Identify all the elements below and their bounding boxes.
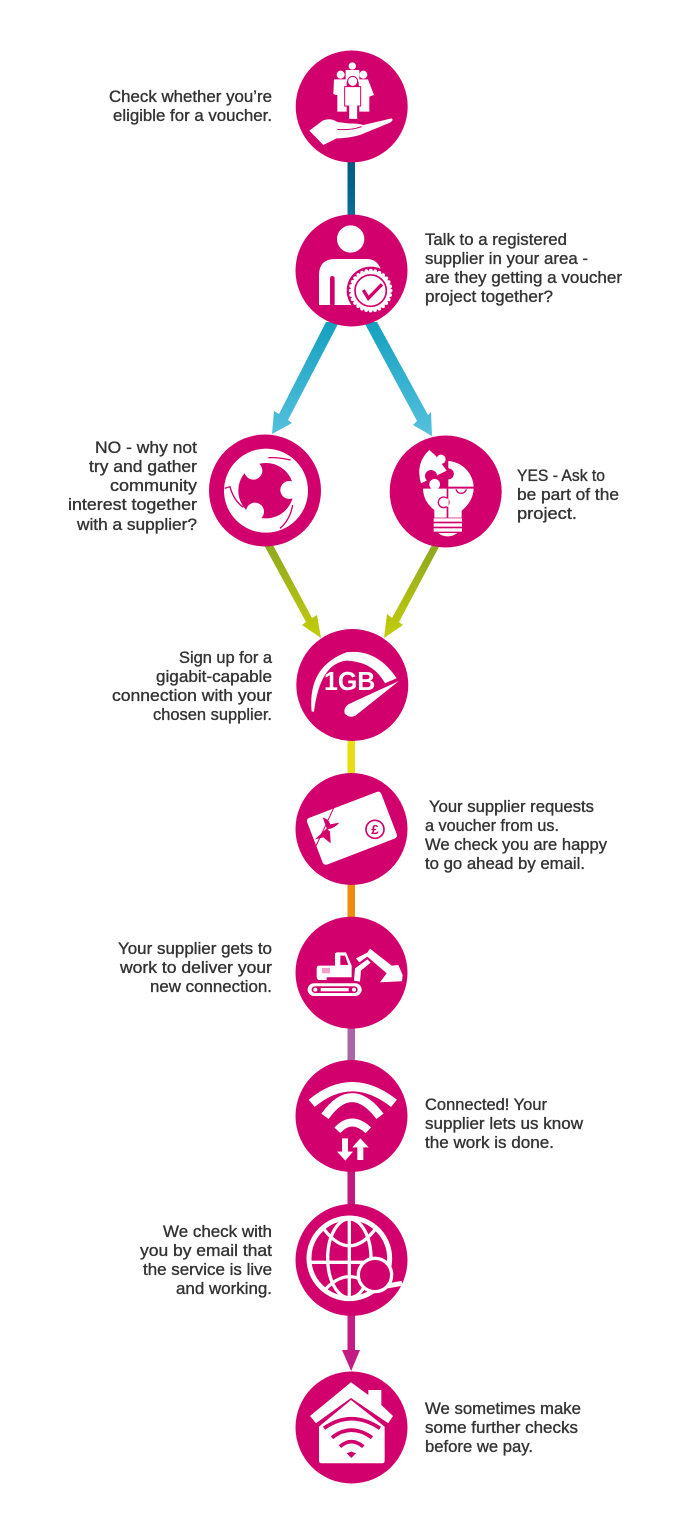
icon: people above an open hand <box>309 62 393 145</box>
icon: excavator <box>308 949 403 996</box>
text: connected: supplier lets us know <box>425 1115 583 1133</box>
text: service check: the service is live <box>143 1261 272 1279</box>
text: NO branch: with a supplier? <box>76 516 197 534</box>
icon: wifi with up and down arrows <box>312 1087 394 1161</box>
connector: works to connected <box>348 1026 355 1064</box>
text: connected: Connected! Your <box>425 1096 547 1114</box>
text: NO branch: interest together <box>68 496 198 514</box>
text: service check: We check with <box>163 1223 272 1241</box>
text: NO branch: try and gather <box>89 458 198 476</box>
connector: step 1 to step 2 <box>348 160 355 218</box>
step 2: registered supplier <box>296 214 408 326</box>
text: connected: the work is done. <box>425 1134 554 1152</box>
step 9: service check <box>296 1204 408 1316</box>
text: sign up: connection with your <box>112 687 273 705</box>
text: service check: and working. <box>176 1280 272 1298</box>
step 1: eligibility <box>296 50 408 162</box>
icon: jigsaw lightbulb <box>419 450 474 536</box>
circle <box>296 50 408 162</box>
step 3: NO branch <box>209 434 321 546</box>
icon: person with rosette tick badge <box>319 225 395 315</box>
text: voucher request: Your supplier requests <box>429 798 594 816</box>
circle <box>296 1204 408 1316</box>
step 6: voucher request <box>296 773 408 885</box>
arrow: NO branch to sign up <box>264 545 321 638</box>
icon: 1GB speedometer: 1GB <box>324 666 375 696</box>
circle <box>296 214 408 326</box>
text: further checks: before we pay. <box>425 1438 533 1456</box>
step 7: build work <box>296 917 408 1029</box>
text: build work: Your supplier gets to <box>118 940 272 958</box>
text: step 2: supplier in your area - <box>425 250 588 268</box>
text: step 2: project together? <box>425 288 553 306</box>
text: further checks <box>425 1400 581 1456</box>
step 10: further checks <box>296 1372 408 1484</box>
text: voucher request <box>425 798 608 873</box>
text: YES branch: YES - Ask to <box>517 467 605 485</box>
arrow: to YES branch <box>364 322 432 436</box>
text: step 2: Talk to a registered <box>425 231 567 249</box>
connector: voucher to works <box>348 882 355 920</box>
text: NO branch: NO - why not <box>95 439 197 457</box>
text: sign up <box>112 649 273 724</box>
circle <box>296 917 408 1029</box>
text: YES branch: be part of the <box>517 486 619 504</box>
arrow: YES branch to sign up <box>384 545 440 638</box>
text: sign up: chosen supplier. <box>153 706 272 724</box>
text: service check <box>140 1223 272 1298</box>
text: service check: you by email that <box>140 1242 272 1260</box>
text: further checks: We sometimes make <box>425 1400 581 1418</box>
arrow: to NO branch <box>272 322 339 434</box>
text: voucher request: a voucher from us. <box>425 817 559 835</box>
text: NO branch <box>68 439 198 534</box>
icon: house with wifi <box>310 1382 393 1463</box>
icon: three people in a circle <box>224 449 308 533</box>
text: NO branch: community <box>110 477 198 495</box>
text: sign up: Sign up for a <box>179 649 273 667</box>
circle <box>296 773 408 885</box>
text: step 2: are they getting a voucher <box>425 269 623 287</box>
text: build work <box>118 940 273 996</box>
text: voucher request: We check you are happy <box>425 836 608 854</box>
text: sign up: gigabit-capable <box>156 668 272 686</box>
text: build work: work to deliver your <box>119 959 273 977</box>
text: step 1: eligible for a voucher. <box>113 107 272 125</box>
text: build work: new connection. <box>150 978 272 996</box>
connector: connected to check <box>348 1170 355 1208</box>
icon: gift voucher card: £ <box>371 822 379 837</box>
circle <box>390 436 502 548</box>
text: step 1: Check whether you’re <box>109 88 272 106</box>
step 4: YES branch <box>390 436 502 548</box>
text: YES branch <box>517 467 619 523</box>
text: step 1 <box>109 88 272 125</box>
text: step 2 <box>425 231 623 306</box>
circle <box>296 1060 408 1172</box>
text: connected <box>425 1096 583 1152</box>
step 8: connected <box>296 1060 408 1172</box>
text: YES branch: project. <box>517 505 577 523</box>
circle <box>209 434 321 546</box>
icon: globe with magnifying glass <box>309 1218 402 1299</box>
connector: sign up to voucher <box>348 738 355 776</box>
text: further checks: some further checks <box>425 1419 578 1437</box>
circle <box>296 629 408 741</box>
circle <box>296 1372 408 1484</box>
arrow: check to further checks <box>342 1314 360 1371</box>
text: voucher request: to go ahead by email. <box>425 855 585 873</box>
step 5: gigabit connection <box>296 629 408 741</box>
